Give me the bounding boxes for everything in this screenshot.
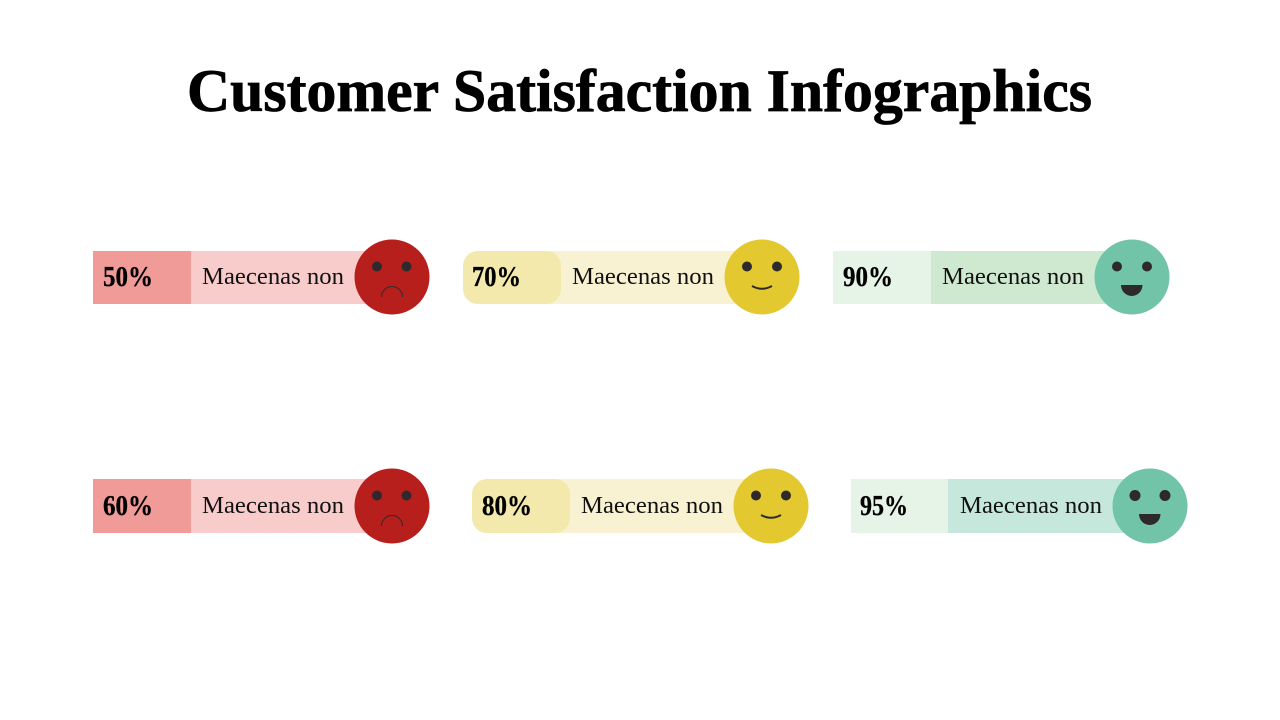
value: 50%: 50% <box>103 262 153 293</box>
icon: happy face <box>1094 240 1170 314</box>
card: 70% <box>463 240 800 314</box>
icon: happy face <box>1112 468 1188 544</box>
value: 70%: 70% <box>472 262 521 293</box>
icon: sad face <box>354 240 430 314</box>
label: Maecenas non: Maecenas non <box>942 263 1084 290</box>
label: Maecenas non: Maecenas non <box>581 492 723 519</box>
icon: sad face <box>354 468 430 544</box>
card: 95% <box>851 468 1188 544</box>
value: 60%: 60% <box>103 491 153 522</box>
value: 95%: 95% <box>860 491 908 522</box>
label: Maecenas non: Maecenas non <box>572 263 714 290</box>
icon: smiling face <box>724 240 800 314</box>
icon: smiling face <box>734 468 808 544</box>
value: 90%: 90% <box>843 262 893 293</box>
card: 50% <box>93 240 430 314</box>
value: 80%: 80% <box>482 491 532 522</box>
label: Maecenas non: Maecenas non <box>202 492 344 519</box>
card: 90% <box>833 240 1170 314</box>
label: Maecenas non: Maecenas non <box>960 492 1102 519</box>
card: 80% <box>472 468 808 544</box>
card: 60% <box>93 468 430 544</box>
label: Maecenas non: Maecenas non <box>202 263 344 290</box>
title: Customer Satisfaction Infographics <box>187 58 1092 124</box>
